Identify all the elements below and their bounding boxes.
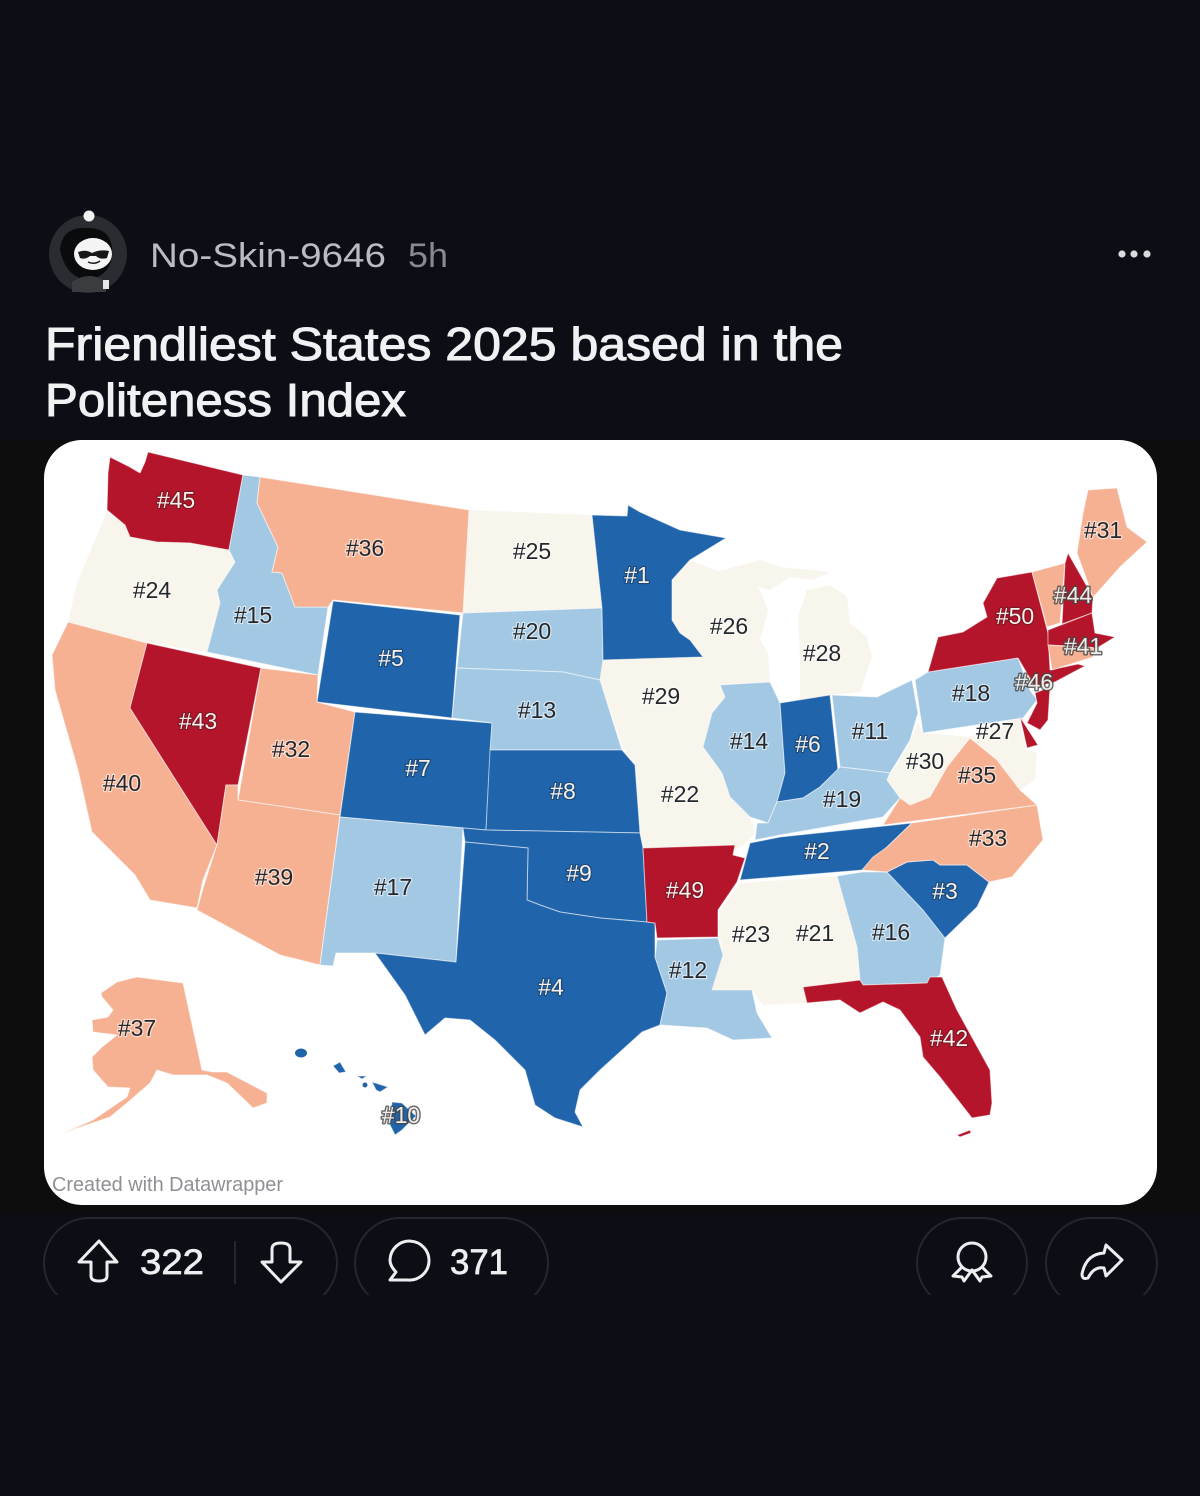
Mississippi — [712, 880, 807, 1005]
state rank labels: #31 — [1084, 517, 1122, 543]
North Carolina — [862, 805, 1043, 882]
Massachusetts — [1048, 613, 1115, 648]
Nevada — [130, 643, 261, 845]
Ohio — [832, 680, 918, 773]
share pill — [1045, 1217, 1158, 1295]
Montana — [257, 477, 469, 613]
state rank labels: #32 — [272, 736, 310, 762]
Kansas — [486, 750, 640, 833]
New Jersey — [1027, 687, 1050, 730]
title: Friendliest States 2025 based in the — [45, 318, 843, 370]
state rank labels: #33 — [969, 825, 1007, 851]
icon: downvote arrow — [262, 1243, 301, 1282]
state rank labels: #35 — [958, 762, 996, 788]
state rank labels: #43 — [179, 708, 217, 734]
state rank labels: #23 — [732, 921, 770, 947]
Alaska — [63, 977, 267, 1133]
New York — [928, 572, 1085, 687]
state rank labels: #21 — [796, 920, 834, 946]
New Hampshire — [1062, 553, 1093, 624]
state rank labels: #46 — [1015, 669, 1053, 695]
state rank labels: #17 — [374, 874, 412, 900]
state rank labels: #45 — [157, 487, 195, 513]
state rank labels: #27 — [976, 718, 1014, 744]
state rank labels: #3 — [932, 878, 958, 904]
West Virginia — [887, 723, 970, 805]
state rank labels: #36 — [346, 535, 384, 561]
username and post age: No-Skin-9646 — [150, 237, 386, 275]
state rank labels: #25 — [513, 538, 551, 564]
Oklahoma — [463, 828, 647, 922]
Oregon — [68, 512, 235, 652]
state rank labels: #7 — [405, 755, 431, 781]
Alabama — [785, 876, 860, 987]
title: Politeness Index — [45, 374, 406, 426]
North Dakota — [463, 510, 602, 613]
Missouri — [622, 745, 755, 850]
state rank labels: #18 — [952, 680, 990, 706]
Georgia — [837, 872, 945, 985]
comment pill — [354, 1217, 549, 1295]
California — [52, 622, 217, 908]
state rank labels: #39 — [255, 864, 293, 890]
Florida keys — [957, 1130, 971, 1137]
state rank labels: #42 — [930, 1025, 968, 1051]
state rank labels: #11 — [852, 718, 888, 744]
US choropleth map — [52, 452, 1147, 1137]
state rank labels: #13 — [518, 697, 556, 723]
state rank labels: #22 — [661, 781, 699, 807]
icon: comment bubble — [390, 1241, 429, 1280]
state rank labels: #44 — [1054, 582, 1092, 608]
state rank labels: #14 — [730, 728, 768, 754]
Pennsylvania — [915, 658, 1037, 733]
Idaho — [207, 475, 328, 675]
Utah — [238, 668, 355, 815]
Michigan upper peninsula — [713, 560, 830, 590]
Michigan lower peninsula — [798, 585, 872, 700]
state rank labels: #5 — [378, 645, 404, 671]
state rank labels: #30 — [906, 748, 944, 774]
state rank labels: #41 — [1064, 633, 1102, 659]
Tennessee — [740, 823, 912, 880]
South Carolina — [887, 860, 989, 938]
icon: upvote arrow — [79, 1241, 117, 1281]
Arkansas — [643, 845, 745, 938]
username and post age: 5h — [408, 237, 448, 275]
icon: award ribbon — [953, 1243, 991, 1281]
state rank labels: #20 — [513, 618, 551, 644]
Louisiana — [655, 938, 772, 1040]
Colorado — [340, 712, 492, 830]
title — [45, 318, 843, 426]
New Mexico — [320, 817, 463, 966]
state rank labels: #50 — [996, 603, 1034, 629]
state rank labels: #26 — [710, 613, 748, 639]
Delaware — [1020, 717, 1038, 748]
state rank labels: #10 — [382, 1102, 420, 1128]
Nebraska — [452, 668, 622, 750]
state rank labels: #8 — [550, 778, 576, 804]
Kentucky — [755, 767, 900, 840]
state rank labels: #16 — [872, 919, 910, 945]
upvote count: 322 — [140, 1243, 204, 1282]
state rank labels — [103, 487, 1122, 1128]
state rank labels: #4 — [538, 974, 564, 1000]
Minnesota — [592, 505, 726, 660]
Illinois — [703, 682, 785, 823]
award pill — [916, 1217, 1028, 1295]
Texas — [375, 842, 667, 1127]
Maine — [1077, 488, 1147, 597]
state rank labels: #29 — [642, 683, 680, 709]
Washington — [107, 452, 243, 550]
state rank labels: #15 — [234, 602, 272, 628]
state rank labels: #9 — [566, 860, 592, 886]
state rank labels: #49 — [666, 877, 704, 903]
Wyoming — [317, 601, 460, 718]
state rank labels: #1 — [624, 562, 650, 588]
state rank labels: #2 — [804, 838, 830, 864]
vote pill — [43, 1217, 338, 1295]
map card — [44, 440, 1157, 1205]
datawrapper credit: Created with Datawrapper — [52, 1174, 283, 1196]
comment count: 371 — [450, 1243, 508, 1282]
Florida — [803, 977, 992, 1118]
South Dakota — [457, 608, 603, 680]
Vermont — [1032, 563, 1065, 627]
icon: share arrow — [1082, 1245, 1122, 1278]
avatar — [49, 210, 127, 293]
Indiana — [777, 695, 838, 802]
menu dots — [1118, 250, 1151, 258]
Connecticut and Rhode Island — [1048, 645, 1093, 670]
state rank labels: #37 — [118, 1015, 156, 1041]
Arizona — [197, 785, 340, 965]
state rank labels: #19 — [823, 786, 861, 812]
state rank labels: #24 — [133, 577, 171, 603]
Hawaii — [295, 1048, 416, 1135]
state rank labels: #28 — [803, 640, 841, 666]
Iowa — [600, 657, 725, 747]
Wisconsin — [672, 560, 770, 685]
state rank labels: #40 — [103, 770, 141, 796]
Virginia — [883, 738, 1037, 825]
Maryland — [970, 718, 1037, 790]
state rank labels: #6 — [795, 731, 821, 757]
state rank labels: #12 — [669, 957, 707, 983]
